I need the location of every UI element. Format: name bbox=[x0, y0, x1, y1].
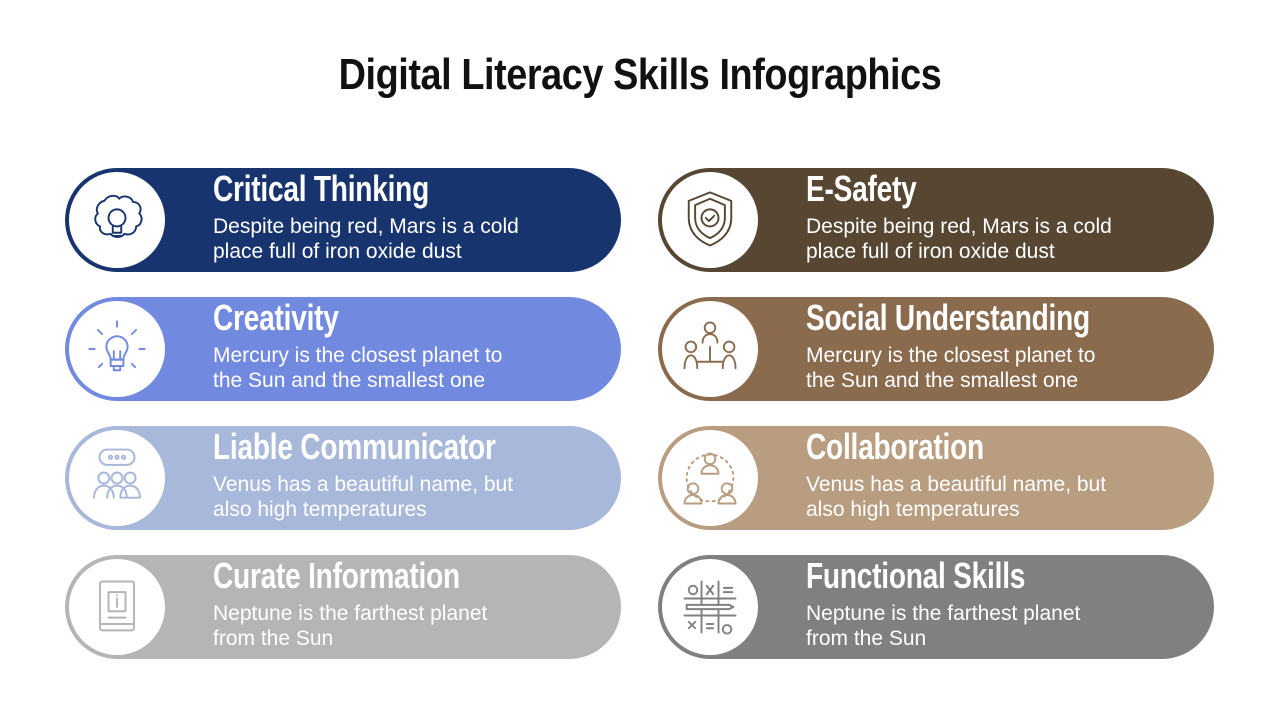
text: also high temperatures bbox=[806, 498, 1020, 521]
text: Venus has a beautiful name, but bbox=[806, 473, 1106, 496]
panel: creativity bbox=[65, 297, 621, 401]
text bbox=[213, 602, 488, 650]
text: also high temperatures bbox=[213, 498, 427, 521]
text: place full of iron oxide dust bbox=[213, 240, 462, 263]
panel: curate information bbox=[65, 555, 621, 659]
panel: liable communicator bbox=[65, 426, 621, 530]
heading: Curate Information bbox=[213, 555, 460, 596]
text: from the Sun bbox=[213, 627, 333, 650]
text bbox=[213, 344, 502, 392]
text bbox=[806, 344, 1095, 392]
text: Neptune is the farthest planet bbox=[806, 602, 1080, 625]
panel: functional skills bbox=[658, 555, 1214, 659]
text: Mercury is the closest planet to bbox=[806, 344, 1095, 367]
text: Venus has a beautiful name, but bbox=[213, 473, 513, 496]
text: the Sun and the smallest one bbox=[806, 369, 1078, 392]
icon: tic tac toe pencil bbox=[662, 559, 758, 655]
panel: collaboration bbox=[658, 426, 1214, 530]
panel: e-safety bbox=[658, 168, 1214, 272]
icon: shield bbox=[662, 172, 758, 268]
heading: Collaboration bbox=[806, 426, 984, 467]
heading: Social Understanding bbox=[806, 297, 1090, 338]
text: Despite being red, Mars is a cold bbox=[213, 215, 519, 238]
text bbox=[806, 215, 1112, 263]
icon: brain bulb bbox=[69, 172, 165, 268]
icon: bulb bbox=[69, 301, 165, 397]
text: from the Sun bbox=[806, 627, 926, 650]
icon: group chat bbox=[69, 430, 165, 526]
title: Digital Literacy Skills Infographics bbox=[339, 50, 941, 99]
icon: team table bbox=[662, 301, 758, 397]
heading: E-Safety bbox=[806, 168, 916, 209]
text: Neptune is the farthest planet bbox=[213, 602, 487, 625]
panel: social understanding bbox=[658, 297, 1214, 401]
text: the Sun and the smallest one bbox=[213, 369, 485, 392]
text bbox=[806, 602, 1080, 650]
text: Mercury is the closest planet to bbox=[213, 344, 502, 367]
text bbox=[806, 473, 1106, 521]
heading: Liable Communicator bbox=[213, 426, 496, 467]
text bbox=[213, 473, 513, 521]
heading: Functional Skills bbox=[806, 555, 1025, 596]
heading: Critical Thinking bbox=[213, 168, 429, 209]
text bbox=[213, 215, 519, 263]
icon: collaboration bbox=[662, 430, 758, 526]
panel: critical thinking bbox=[65, 168, 621, 272]
icon: info book bbox=[69, 559, 165, 655]
heading: Creativity bbox=[213, 297, 339, 338]
text: Despite being red, Mars is a cold bbox=[806, 215, 1112, 238]
text: place full of iron oxide dust bbox=[806, 240, 1055, 263]
